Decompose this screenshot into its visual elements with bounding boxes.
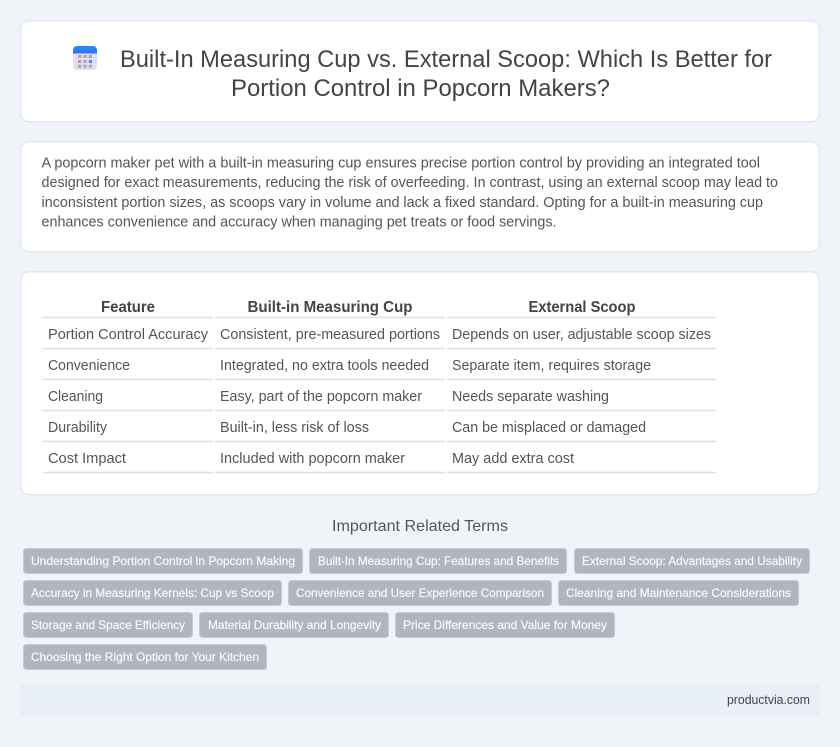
table row: durability: [48, 420, 646, 436]
title: Built-In Measuring Cup vs. External Scoop: Which Is Better for: [120, 46, 772, 73]
related terms chips: Convenience and User Experience Comparison: [296, 586, 544, 600]
table row: durability: Can be misplaced or damaged: [452, 420, 646, 436]
table header: Feature: [101, 299, 155, 316]
related terms chips: Built-In Measuring Cup: Features and Benefits: [318, 554, 559, 568]
header panel: [21, 21, 819, 122]
table row: portion control accuracy: Portion Control Accuracy: [48, 327, 209, 343]
table row: cost impact: [48, 451, 574, 467]
related terms chips: External Scoop: Advantages and Usability: [582, 554, 802, 568]
related terms chips: Choosing the Right Option for Your Kitchen: [31, 650, 259, 664]
panel: summary paragraph: [21, 142, 819, 252]
table row: durability: Built-in, less risk of loss: [220, 420, 369, 436]
icon: calendar: [73, 46, 97, 70]
related terms chips: Storage and Space Efficiency: [31, 618, 185, 632]
table row: convenience: Convenience: [48, 358, 130, 374]
related terms chips: [24, 548, 810, 670]
text block: summary: enhances convenience and accuracy when managing pet treats or food servings.: [42, 214, 556, 230]
table row: portion control accuracy: Depends on user, adjustable scoop sizes: [452, 327, 711, 343]
table row: convenience: Integrated, no extra tools needed: [220, 358, 429, 374]
footer: productvia.com: [727, 693, 810, 707]
heading: important related terms: Important Related Terms: [332, 518, 508, 535]
table header: External Scoop: [528, 299, 636, 316]
text block: summary: [42, 156, 778, 230]
table header: [101, 299, 636, 316]
related terms chips: Accuracy in Measuring Kernels: Cup vs Scoop: [31, 586, 274, 600]
table row: cleaning: Easy, part of the popcorn maker: [220, 389, 422, 405]
related terms chips: Cleaning and Maintenance Considerations: [566, 586, 791, 600]
table row: cleaning: Needs separate washing: [452, 389, 609, 405]
text block: summary: designed for exact measurements, reducing the risk of overfeeding. In contrast, using an external scoop may lead to: [42, 175, 778, 191]
text block: summary: A popcorn maker pet with a built-in measuring cup ensures precise portion control by providing an integrated tool: [42, 156, 760, 172]
related terms chips: Material Durability and Longevity: [208, 618, 381, 632]
table row: portion control accuracy: [48, 327, 711, 343]
footer: [20, 683, 820, 717]
table row: cost impact: Cost Impact: [48, 451, 126, 467]
related terms chips: Price Differences and Value for Money: [403, 618, 607, 632]
table row: convenience: Separate item, requires storage: [452, 358, 651, 374]
title: [120, 46, 772, 102]
panel: comparison table: [21, 272, 819, 495]
table header: Built-in Measuring Cup: [248, 299, 413, 316]
table row: portion control accuracy: Consistent, pre-measured portions: [220, 327, 440, 343]
text block: summary: inconsistent portion sizes, as scoops vary in volume and lack a fixed standard. Opting for a built-in measuring cup: [42, 195, 763, 211]
table row: convenience: [48, 358, 651, 374]
related terms chips: Understanding Portion Control in Popcorn Making: [31, 554, 295, 568]
table row: cleaning: [48, 389, 609, 405]
title: Portion Control in Popcorn Makers?: [231, 75, 610, 102]
table row: cost impact: May add extra cost: [452, 451, 574, 467]
table row: durability: Durability: [48, 420, 108, 436]
table row: cleaning: Cleaning: [48, 389, 103, 405]
table row: cost impact: Included with popcorn maker: [220, 451, 405, 467]
